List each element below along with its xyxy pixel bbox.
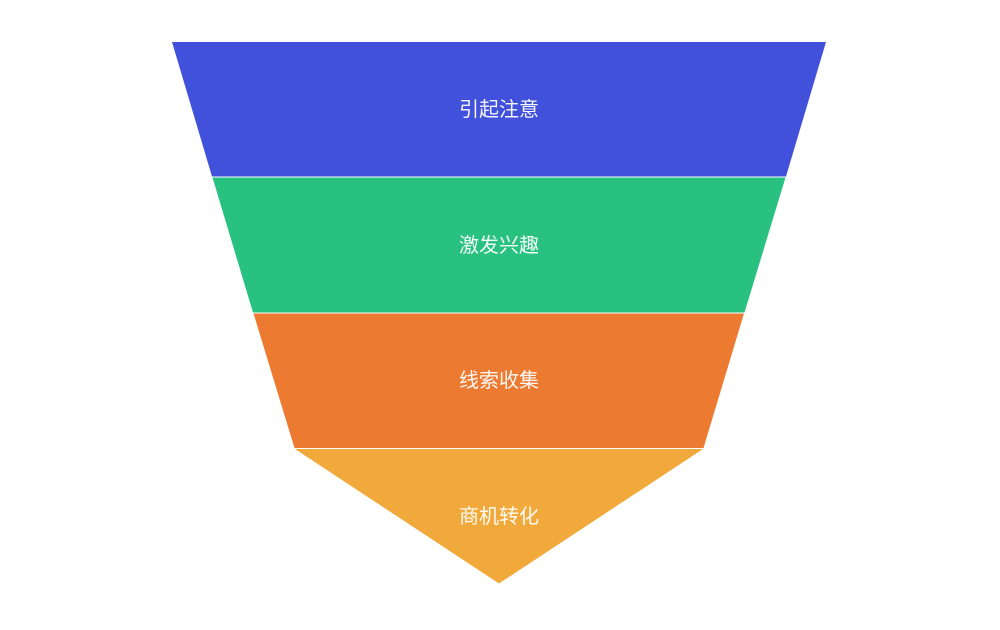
funnel stage 2: 激发兴趣 — [212, 178, 786, 312]
funnel stage 3: 线索收集: 线索收集 — [459, 369, 539, 392]
funnel stage 4: 商机转化: 商机转化 — [459, 505, 539, 528]
funnel stage 1: 引起注意 — [172, 42, 826, 176]
funnel stage 4: 商机转化 — [295, 449, 703, 584]
funnel stage 3: 线索收集 — [254, 314, 744, 448]
funnel stage 1: 引起注意: 引起注意 — [459, 98, 539, 121]
funnel stage 2: 激发兴趣: 激发兴趣 — [459, 234, 539, 257]
